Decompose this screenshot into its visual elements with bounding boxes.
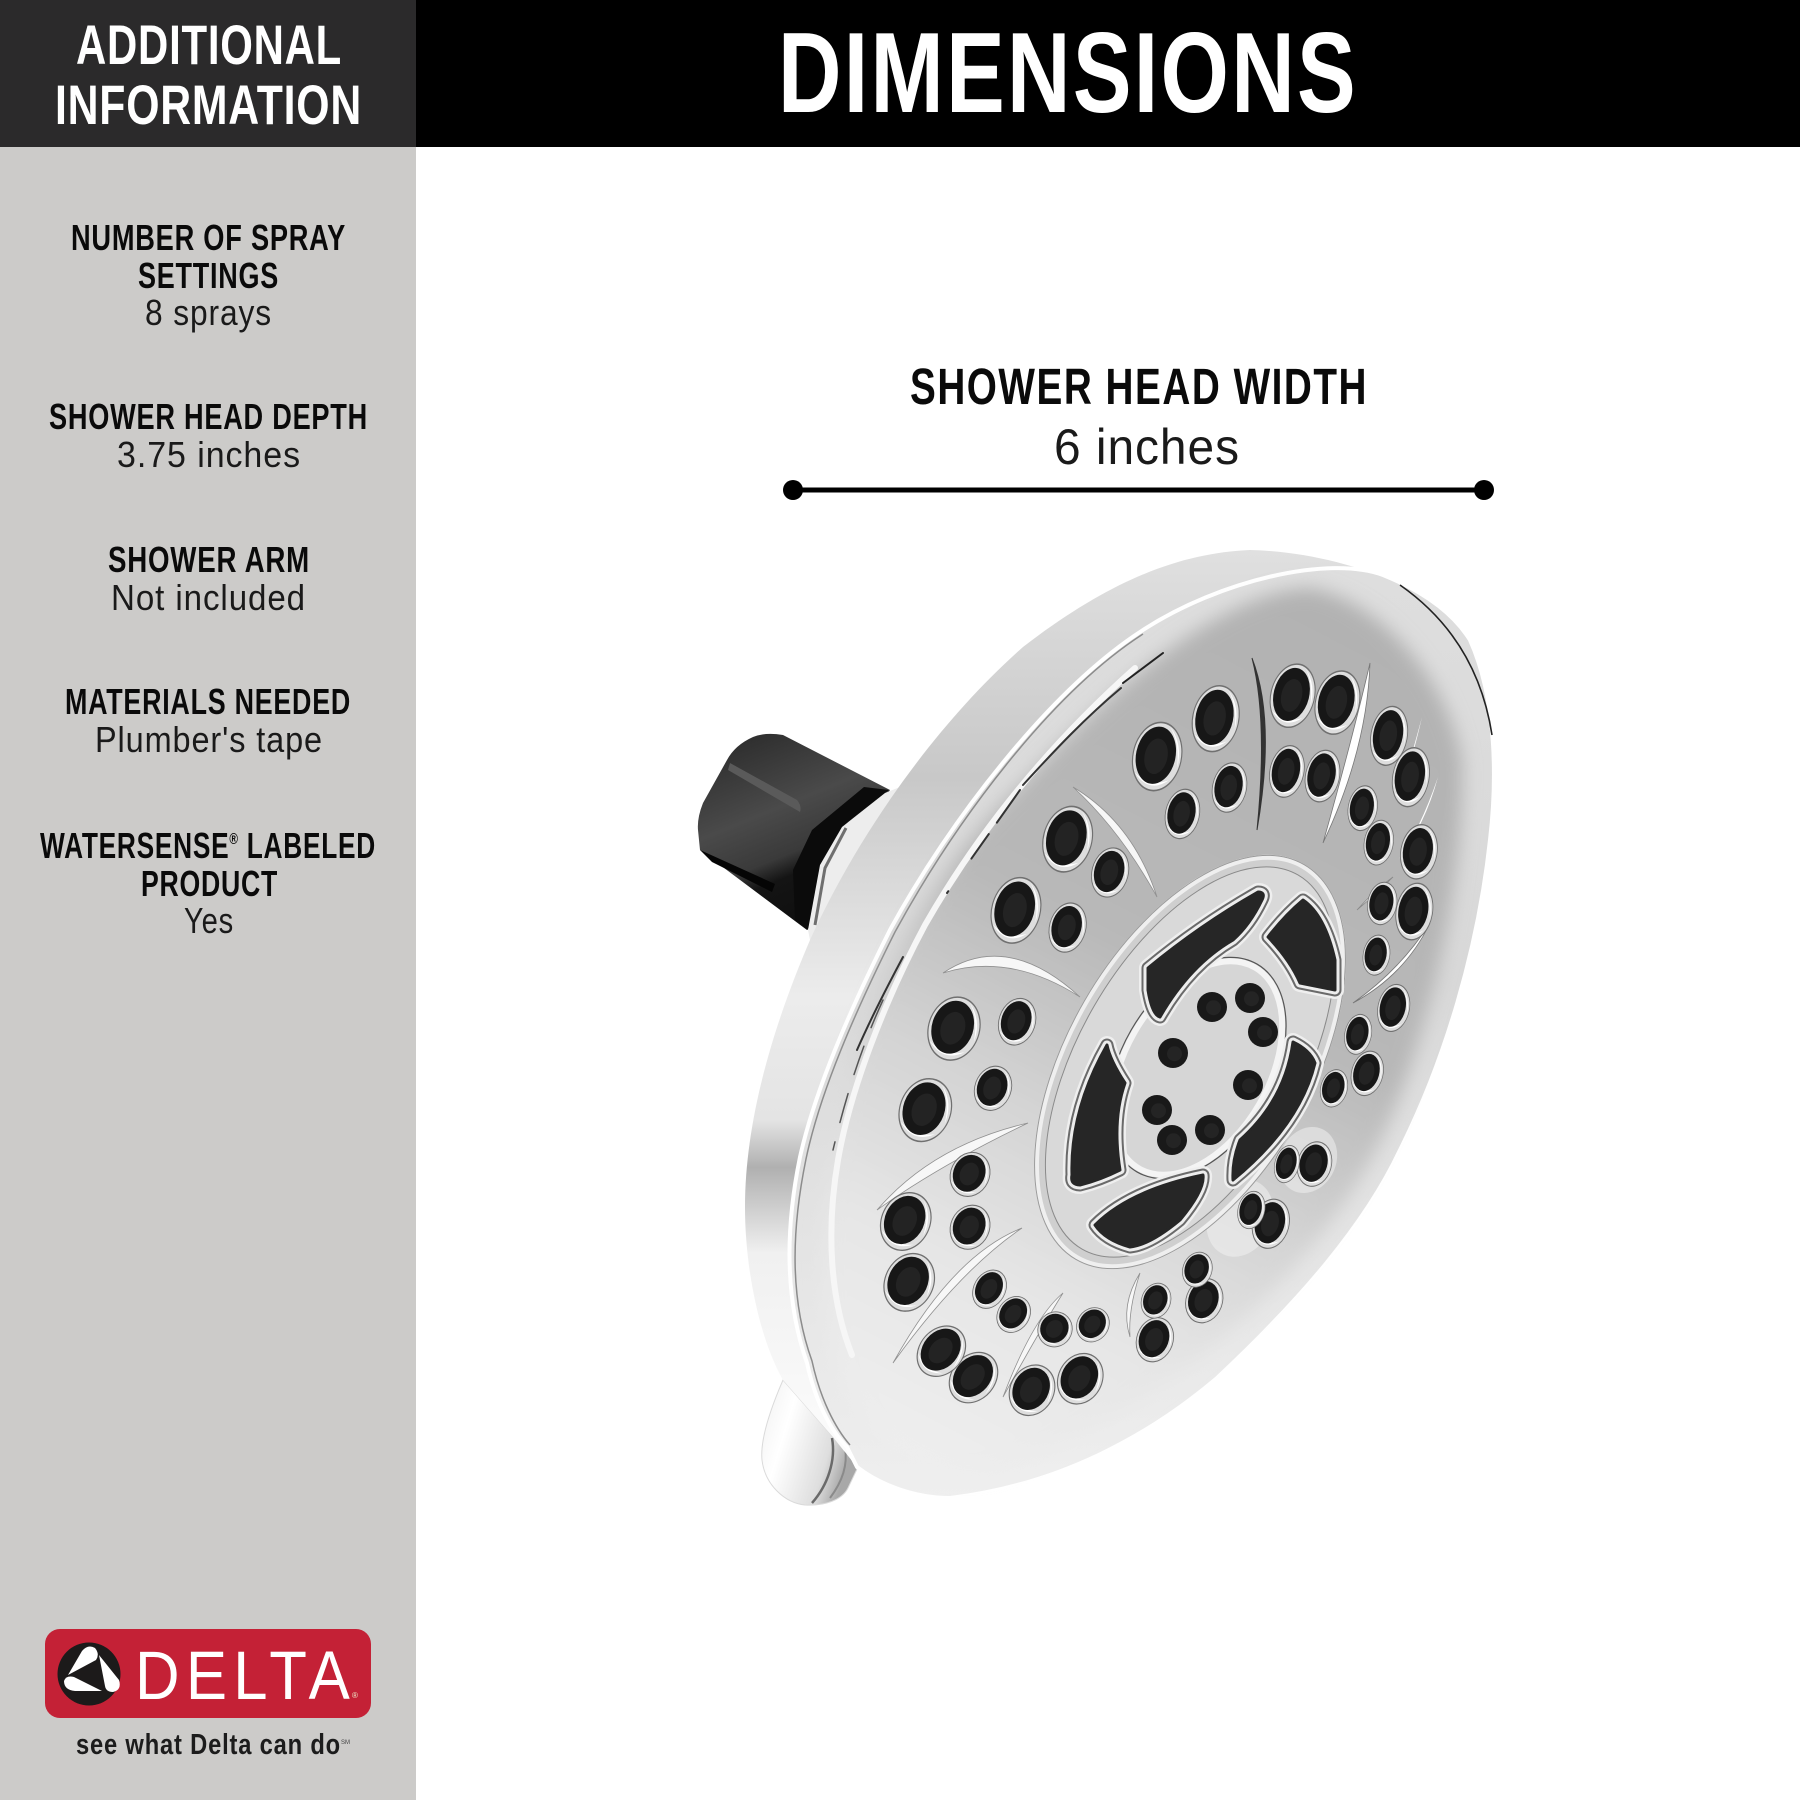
- tagline: SM: [341, 1740, 350, 1746]
- head outer body: [745, 550, 1494, 1498]
- heading: additional information: INFORMATION: [55, 73, 362, 136]
- central spray ring: [970, 804, 1410, 1320]
- tagline: see what Delta can do: [76, 1729, 341, 1761]
- text block: watersense labeled product: LABELED: [239, 825, 376, 866]
- small center jets: [1142, 983, 1278, 1155]
- nozzle group: outer ring: [870, 658, 1442, 1424]
- raised pods near lower right: [1194, 1117, 1348, 1268]
- dark spray pads: [1072, 892, 1335, 1247]
- flange seam line: [795, 634, 1143, 1445]
- text block: shower arm: SHOWER ARM: [108, 539, 310, 580]
- text block: number of spray settings: 8 sprays: [145, 292, 272, 333]
- value: 6 inches: 6 inches: [1054, 419, 1240, 475]
- text block: number of spray settings: NUMBER OF SPRAY: [71, 217, 346, 258]
- nozzles: [870, 658, 1442, 1424]
- text block: shower head depth: SHOWER HEAD DEPTH: [49, 396, 368, 437]
- text block: watersense labeled product: PRODUCT: [141, 863, 278, 904]
- icon: delta triangle mark: [58, 1642, 120, 1706]
- front flange: [790, 568, 1494, 1498]
- heading: additional information: ADDITIONAL: [76, 13, 342, 76]
- text block: materials needed: MATERIALS NEEDED: [65, 681, 351, 722]
- dark groove: [1252, 658, 1265, 830]
- panel: title bar: [416, 0, 1800, 147]
- inner spray disc: [1077, 932, 1317, 1204]
- logo: delta: [45, 1629, 371, 1761]
- heading: shower head width: SHOWER HEAD WIDTH: [910, 358, 1368, 415]
- lever tab: [762, 1380, 858, 1505]
- dimension line: [783, 480, 1494, 500]
- text block: number of spray settings: [71, 217, 346, 333]
- heading: additional information: [55, 13, 362, 136]
- logo: delta: ®: [352, 1691, 358, 1700]
- wordmark: DELTA: [135, 1637, 356, 1714]
- shower head illustration: [698, 550, 1494, 1505]
- text block: shower head depth: 3.75 inches: [117, 434, 301, 475]
- text block: watersense labeled product: WATERSENSE: [40, 825, 299, 866]
- face inner edge highlights: [831, 653, 1163, 1355]
- panel: sidebar background: [0, 147, 416, 1800]
- panel: sidebar header: [0, 0, 416, 147]
- nozzle group: inner ring: [942, 742, 1401, 1354]
- text block: watersense labeled product: Yes: [184, 900, 234, 941]
- outer right edge: [1400, 585, 1492, 735]
- head face: [823, 588, 1462, 1474]
- text block: materials needed: [65, 681, 351, 760]
- text block: shower arm: Not included: [111, 577, 306, 618]
- text block: watersense labeled product: [40, 825, 376, 941]
- spray face scoops: [877, 663, 1438, 1397]
- connector: black swivel nut: [698, 734, 905, 950]
- text block: shower head depth: [49, 396, 368, 475]
- text block: materials needed: Plumber's tape: [95, 719, 323, 760]
- text block: number of spray settings: SETTINGS: [138, 255, 279, 296]
- text block: shower arm: [108, 539, 310, 618]
- text block: watersense labeled product: ®: [229, 831, 239, 848]
- title: DIMENSIONS: [778, 10, 1358, 137]
